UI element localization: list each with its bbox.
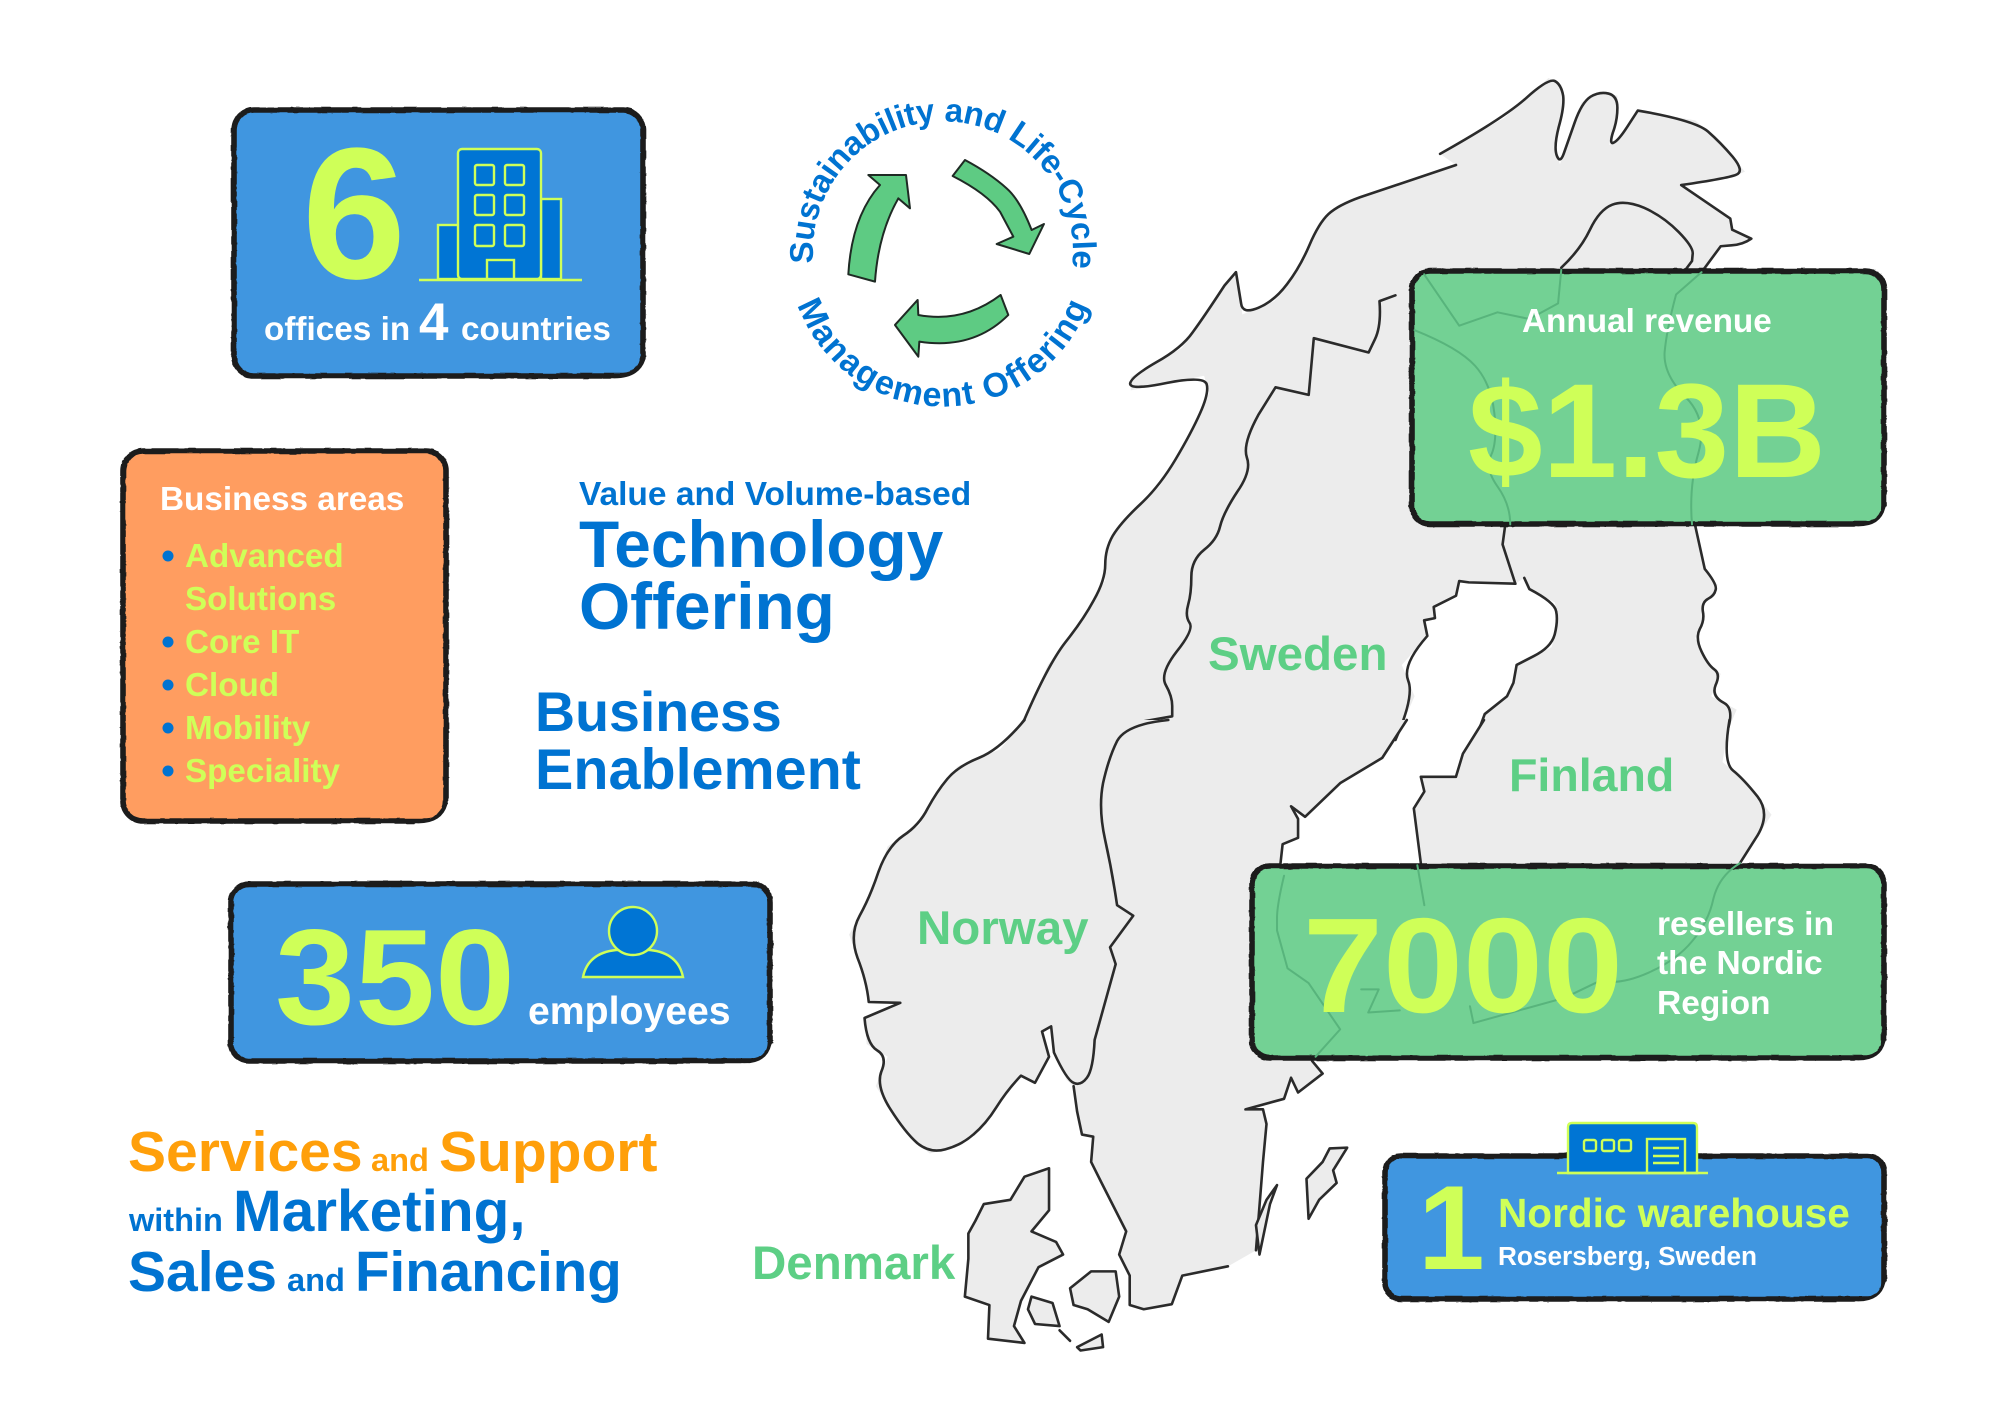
heading: services and support: Services xyxy=(128,1120,363,1184)
circular label with recycling arrows xyxy=(790,104,1097,407)
bullet list: Advanced xyxy=(185,538,344,575)
offices caption: countries xyxy=(461,311,611,348)
heading: technology offering: Value and Volume-based xyxy=(579,476,971,513)
resellers caption: resellers in xyxy=(1657,906,1834,943)
icon: recycling arrows xyxy=(848,160,1044,357)
resellers caption xyxy=(1657,906,1834,1022)
circular text: top: Sustainability and Life-Cycle xyxy=(790,104,1097,268)
heading: services and support: Marketing, xyxy=(233,1179,526,1244)
heading: services and support: and xyxy=(287,1261,345,1298)
big number 1: 1 xyxy=(1418,1161,1485,1295)
offices caption: 4 xyxy=(419,293,449,352)
bullet list: Cloud xyxy=(185,667,279,704)
resellers caption: the Nordic xyxy=(1657,945,1823,982)
icon: person xyxy=(583,907,683,977)
country label: Sweden: Sweden xyxy=(1208,628,1388,681)
heading: services and support: Sales xyxy=(128,1240,277,1304)
big number 7000: 7000 xyxy=(1303,890,1623,1041)
map: northern part xyxy=(1010,78,1751,740)
icon: warehouse xyxy=(1557,1123,1708,1173)
heading: business enablement xyxy=(535,681,861,802)
country label: Finland: Finland xyxy=(1509,749,1674,801)
heading: technology offering xyxy=(579,476,971,643)
bullet list: Core IT xyxy=(185,624,299,661)
map of the Nordic region xyxy=(849,78,1772,1351)
big number 6: 6 xyxy=(302,109,406,318)
heading: services and support xyxy=(128,1120,657,1304)
panel: offices xyxy=(234,109,647,380)
circular text: bottom: Management Offering xyxy=(798,297,1092,407)
heading: services and support: Financing xyxy=(355,1240,622,1303)
offices caption: offices in xyxy=(264,311,410,348)
panel: annual revenue xyxy=(1412,270,1887,528)
map: southern part xyxy=(849,720,1772,1351)
bullet list: Speciality xyxy=(185,753,340,790)
heading: services and support: Support xyxy=(439,1120,657,1184)
warehouse title: Nordic warehouse xyxy=(1498,1190,1850,1236)
panel heading: Business areas xyxy=(160,481,404,518)
heading: business enablement: Business xyxy=(535,681,782,743)
big number 350: 350 xyxy=(275,901,515,1053)
panel: resellers xyxy=(1252,863,1887,1062)
bullet list: Mobility xyxy=(185,710,311,747)
heading: technology offering: Technology xyxy=(579,507,944,581)
country label: Denmark: Denmark xyxy=(752,1237,956,1290)
map lines seen through the panel xyxy=(1415,270,1702,524)
heading: services and support: within xyxy=(128,1202,223,1238)
employees caption: employees xyxy=(528,990,731,1033)
bullet list xyxy=(162,538,344,790)
panel: warehouse xyxy=(1385,1123,1887,1303)
revenue label: Annual revenue xyxy=(1522,303,1772,340)
icon: office building xyxy=(419,149,582,280)
country label: Norway: Norway xyxy=(917,902,1089,955)
map lines seen through the panel xyxy=(1277,863,1740,1057)
heading: business enablement: Enablement xyxy=(535,738,861,802)
bullet list: Solutions xyxy=(185,581,336,618)
resellers caption: Region xyxy=(1657,985,1771,1022)
heading: technology offering: Offering xyxy=(579,569,835,643)
panel: employees xyxy=(231,884,773,1065)
heading: services and support: and xyxy=(371,1141,429,1178)
warehouse location: Rosersberg, Sweden xyxy=(1498,1241,1757,1271)
panel: business areas xyxy=(123,451,449,825)
revenue value: $1.3B xyxy=(1468,357,1826,506)
